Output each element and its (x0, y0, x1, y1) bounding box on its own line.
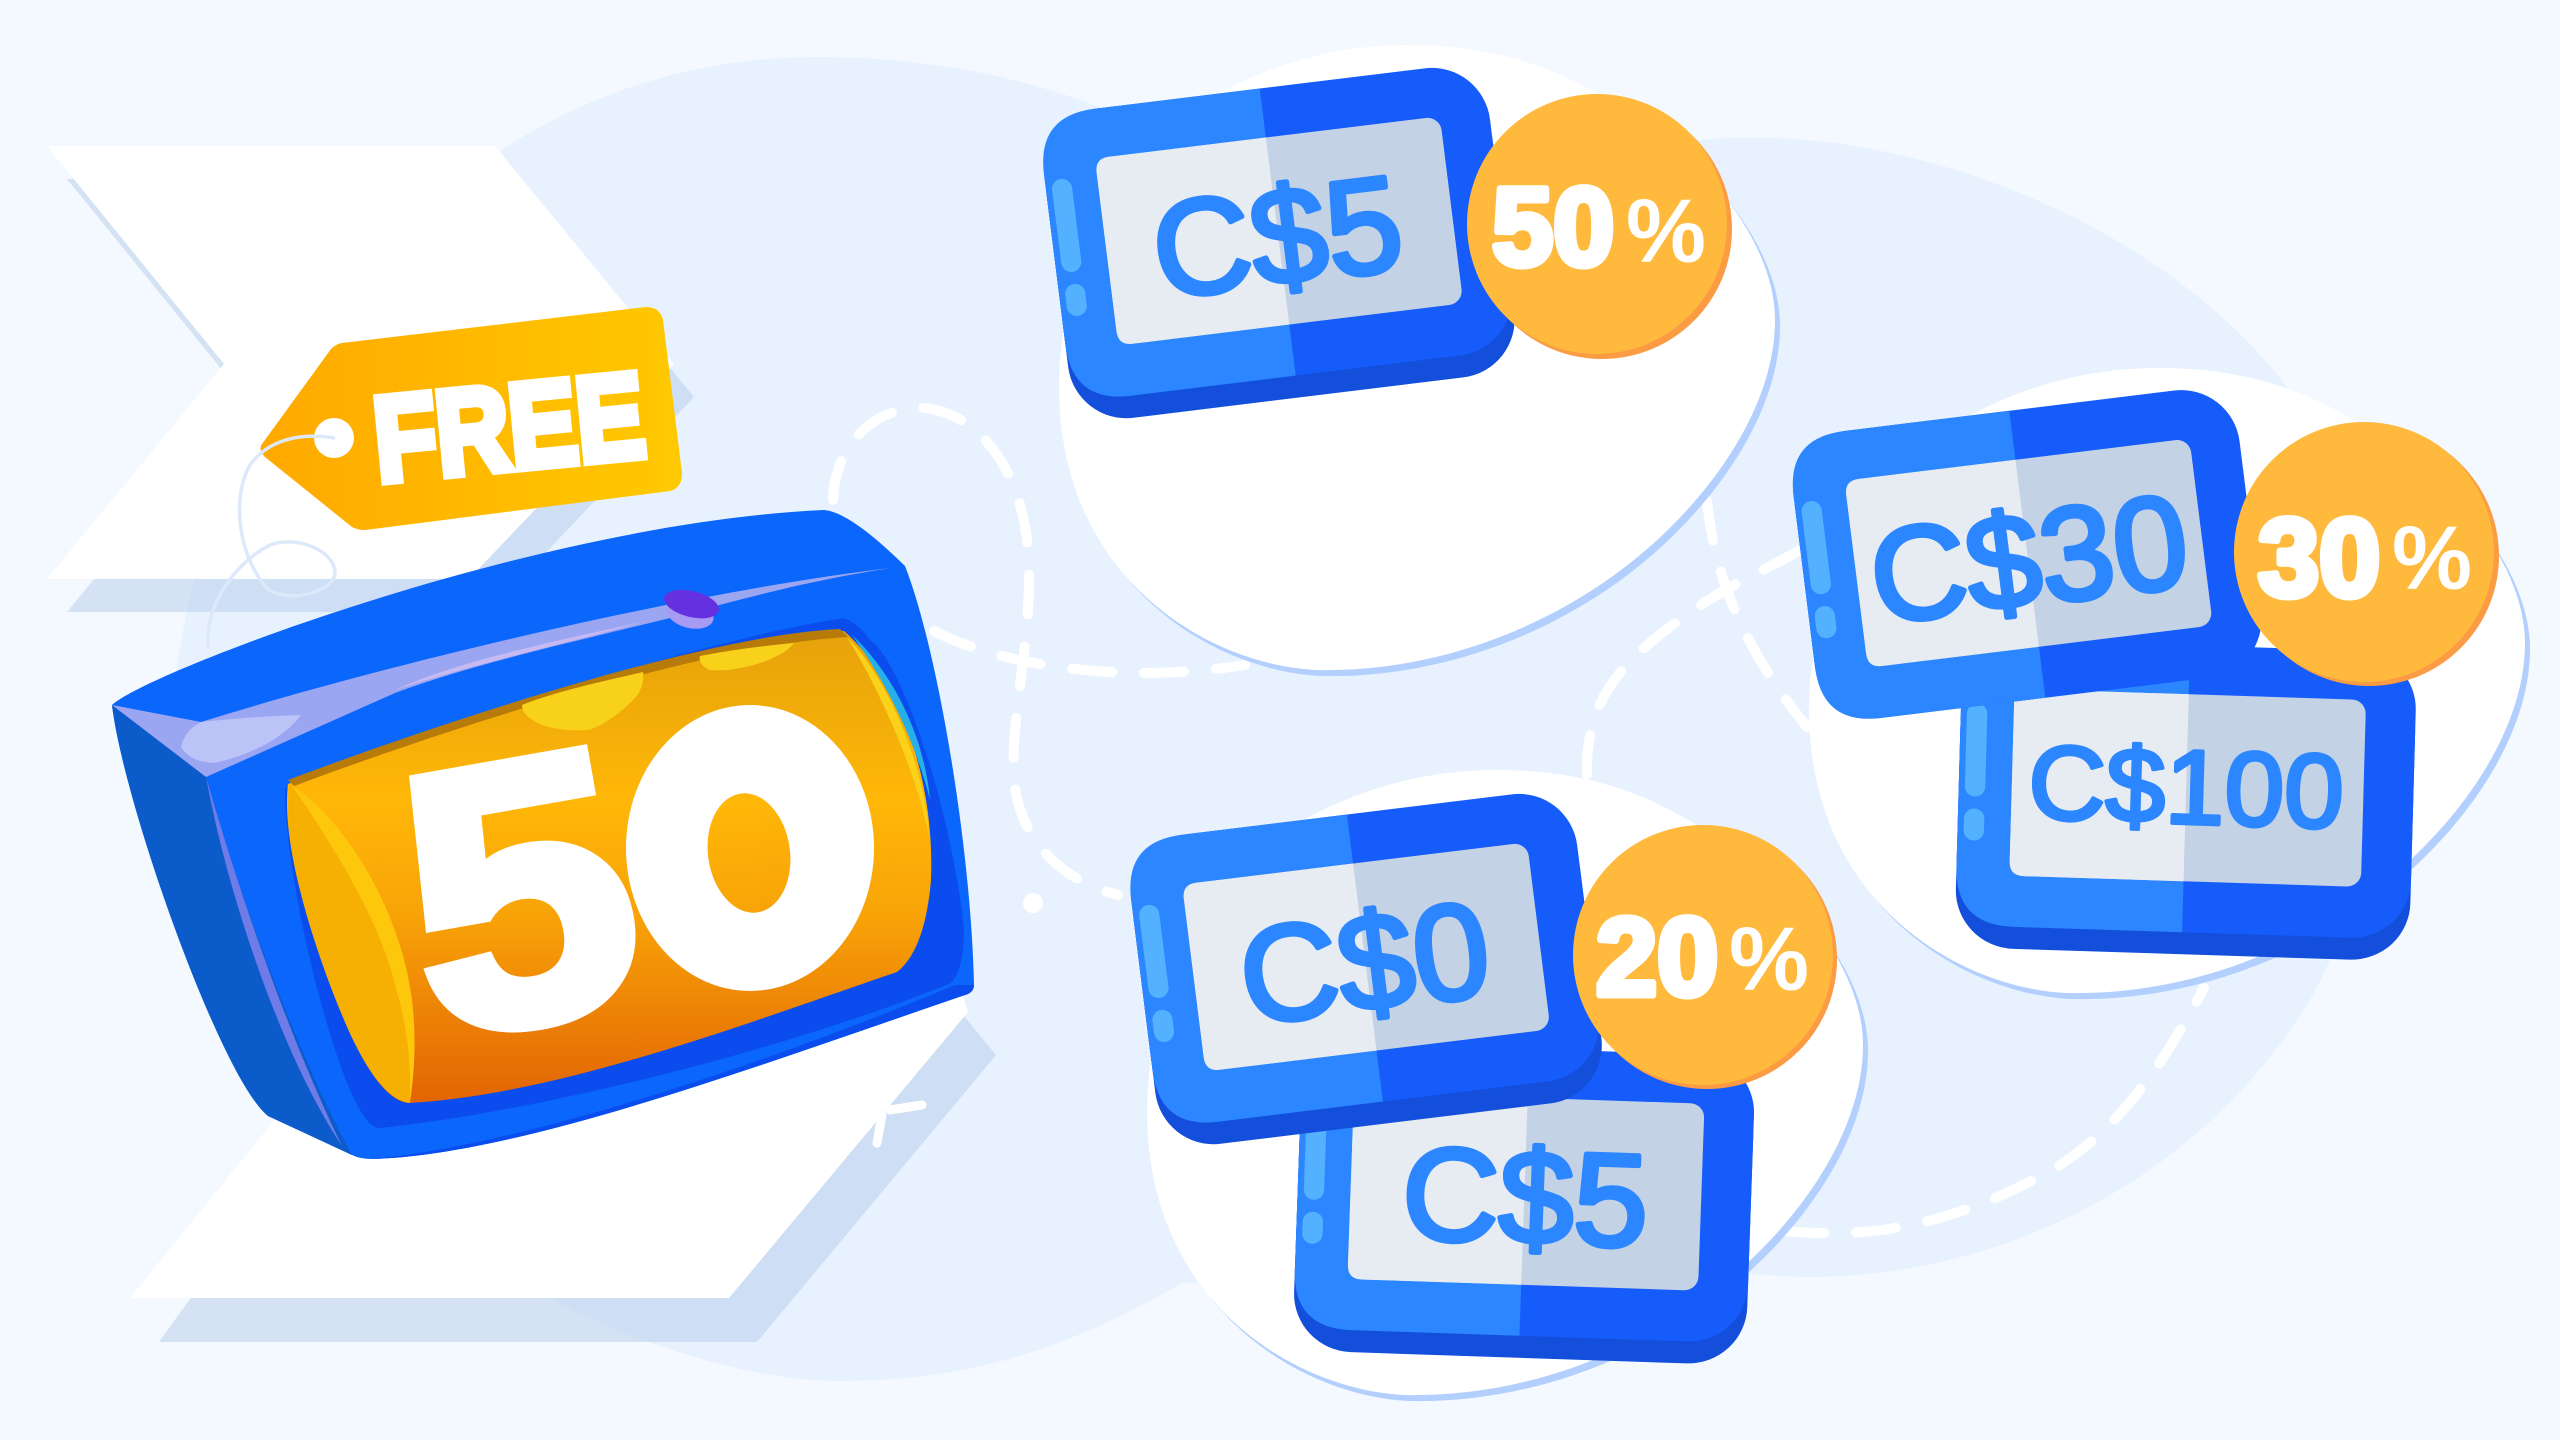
window right yellow edge (847, 637, 929, 835)
blob shadow (1064, 51, 1780, 676)
lid gloss (181, 715, 301, 763)
ticket: C$30 (1786, 383, 2268, 725)
number 50: 5 (374, 669, 666, 1117)
background blob right (1400, 137, 2383, 1277)
ticket: C$0: C$0 (1231, 872, 1498, 1054)
badge: 20%: % (1729, 910, 1809, 1010)
tag hole (314, 418, 354, 458)
ticket: C$5 lower: C$5 (1400, 1120, 1651, 1276)
blob (1809, 368, 2525, 993)
number 50: 0 (638, 662, 864, 1042)
wallet body (112, 510, 974, 1159)
dashed route left loop (833, 408, 1118, 895)
badge: 20% (1573, 825, 1837, 1089)
ticket: C$5 top (1037, 61, 1521, 425)
badge: 50%: % (1626, 182, 1706, 282)
blob shadow (1814, 374, 2530, 999)
window top shade (288, 629, 848, 786)
dashed route middle (1587, 549, 1802, 775)
number 50 (374, 662, 874, 1117)
lobe yellow edge (292, 786, 415, 1100)
window right cyan edge (852, 635, 930, 800)
ticket: C$0 (1124, 787, 1609, 1151)
wallet clasp (659, 585, 722, 634)
dashed route upper right (1707, 501, 1807, 727)
ticket: C$100: C$100 (2027, 724, 2345, 851)
ticket: C$5 top: C$5 (1144, 146, 1411, 328)
ticket: C$30: C$30 (1862, 467, 2196, 653)
background blob left (174, 57, 1500, 1381)
wallet lower edge (372, 985, 974, 1159)
chevron bottom (130, 950, 968, 1298)
panel: lower offer blob (1124, 770, 1868, 1401)
dashed route lower right (1784, 988, 2204, 1233)
route ticks on chevron (877, 1105, 922, 1143)
yellow gloss small (700, 643, 794, 670)
ticket: C$5 lower (1292, 1041, 1756, 1365)
blob (1059, 45, 1775, 670)
panel: free 50 wallet (112, 510, 974, 1159)
panel: free price tag (208, 307, 682, 647)
lid gloss thin (395, 622, 643, 690)
blob (1147, 770, 1863, 1395)
tag string (208, 436, 335, 647)
tag text: FREE (368, 347, 650, 507)
yellow gloss large (522, 672, 643, 730)
ticket: C$100 (1954, 638, 2417, 961)
chevron top (47, 146, 674, 579)
wallet lid highlight (112, 568, 891, 777)
wallet left face (112, 705, 352, 1155)
chevron bottom shadow (159, 1016, 996, 1342)
window frame (285, 618, 964, 1128)
panel: right offer blob (1786, 368, 2530, 999)
badge: 30%: % (2392, 509, 2472, 609)
badge: 20%: 20 (1596, 896, 1718, 1019)
route end dot (1023, 893, 1043, 913)
orange window (287, 631, 931, 1103)
badge: 30%: 30 (2258, 497, 2380, 620)
window left lobe (288, 784, 414, 1103)
background centre fill (1182, 140, 1800, 1283)
tag shape (261, 307, 682, 530)
wallet left edge highlight (206, 777, 342, 1146)
blob shadow (1152, 776, 1868, 1401)
chevron top shadow (67, 179, 694, 612)
badge: 30% (2234, 422, 2499, 686)
panel: top offer blob (1037, 45, 1780, 676)
badge: 50%: 50 (1492, 166, 1614, 289)
badge: 50% (1467, 94, 1732, 359)
dashed route to top ticket (934, 631, 1245, 673)
